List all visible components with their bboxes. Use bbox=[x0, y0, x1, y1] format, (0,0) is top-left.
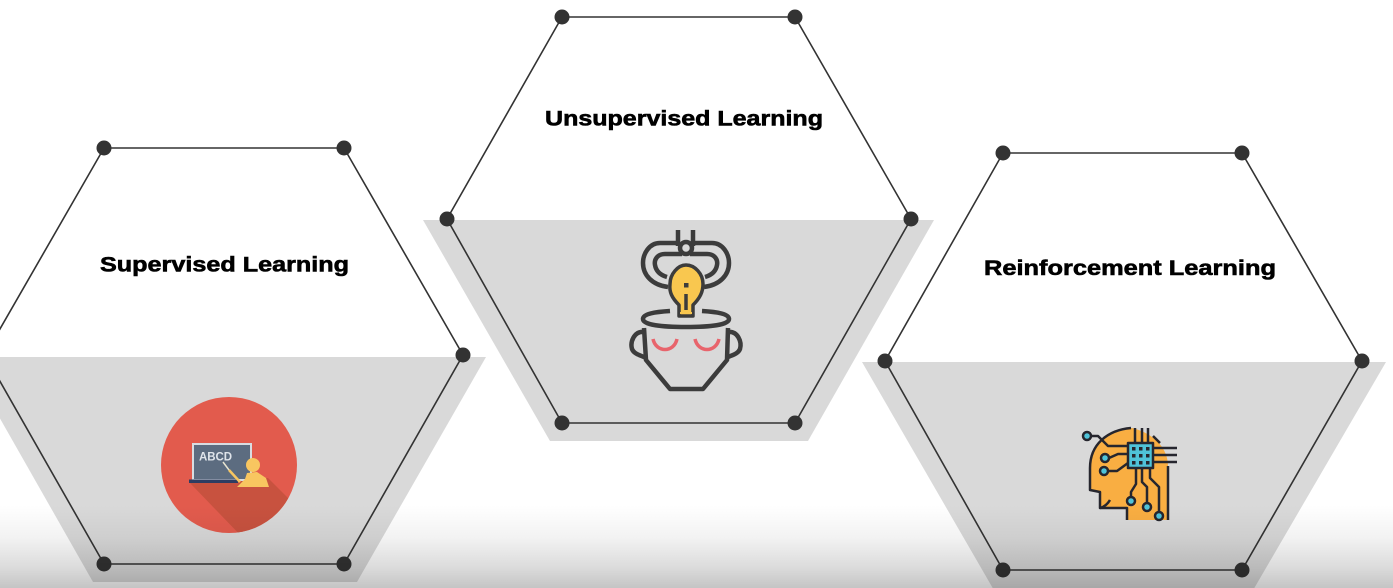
icon: AI head with circuit chip bbox=[1083, 428, 1177, 520]
panel: supervised learning bbox=[0, 140, 486, 582]
icon: head with light bulb bbox=[632, 230, 740, 389]
icon: teacher at chalkboard bbox=[161, 397, 297, 533]
panel base: supervised bbox=[0, 357, 486, 582]
heading: reinforcement learning: Reinforcement Learning bbox=[984, 256, 1276, 280]
heading: unsupervised learning: Unsupervised Learning bbox=[545, 106, 823, 130]
panel: unsupervised learning bbox=[423, 10, 934, 441]
bottom shading bbox=[0, 505, 1393, 588]
heading: supervised learning: Supervised Learning bbox=[100, 252, 349, 276]
panel base: reinforcement bbox=[862, 362, 1386, 588]
hexagon outline: unsupervised bbox=[447, 17, 911, 423]
hexagon nodes: supervised bbox=[96, 140, 470, 572]
hexagon nodes: reinforcement bbox=[878, 146, 1370, 578]
hexagon nodes: unsupervised bbox=[440, 10, 918, 430]
hexagon outline: reinforcement bbox=[885, 153, 1362, 570]
icon: teacher at chalkboard: ABCD bbox=[199, 452, 232, 464]
hexagon outline: supervised bbox=[0, 148, 463, 564]
panel base: unsupervised bbox=[423, 220, 934, 441]
panel: reinforcement learning bbox=[862, 146, 1386, 588]
